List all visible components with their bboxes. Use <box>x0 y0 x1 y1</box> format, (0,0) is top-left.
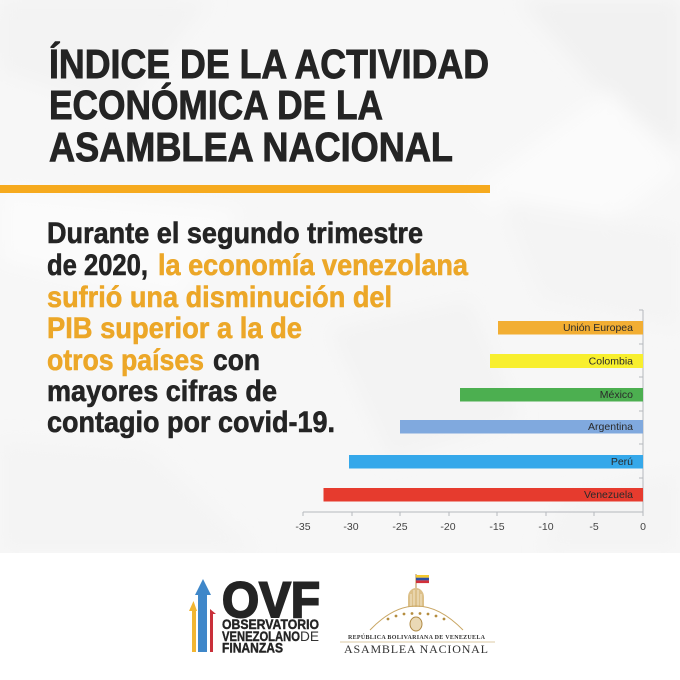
text block: summary: otros países <box>47 344 204 377</box>
logo: Asamblea Nacional: REPÚBLICA BOLIVARIANA DE VENEZUELA <box>348 633 486 641</box>
text block: summary: sufrió una disminución del <box>47 281 392 314</box>
text block: summary: con <box>213 344 260 377</box>
text block: summary <box>47 217 468 439</box>
logo: OVF: VENEZOLANO <box>222 629 300 644</box>
title: ASAMBLEA NACIONAL <box>49 124 453 170</box>
title: ECONÓMICA DE LA <box>49 82 383 128</box>
text block: summary: contagio por covid-19. <box>47 406 335 439</box>
logo: OVF <box>189 572 320 656</box>
text block: summary: mayores cifras de <box>47 375 277 408</box>
bar: México: México <box>600 389 633 401</box>
logo: OVF: OBSERVATORIO <box>222 617 319 632</box>
bar: Perú: Perú <box>611 456 633 468</box>
text block: summary: Durante el segundo trimestre <box>47 217 423 250</box>
axis labels: -35 <box>295 521 311 533</box>
bar: Venezuela: Venezuela <box>584 489 633 501</box>
icon: rising arrows <box>189 579 216 652</box>
text block: summary: de 2020, <box>47 249 148 282</box>
bar: México <box>460 388 643 402</box>
axis labels <box>295 521 646 533</box>
bar: Perú <box>349 455 643 468</box>
text block: summary: PIB superior a la de <box>47 312 302 345</box>
icon: flag <box>416 574 429 588</box>
bar: Argentina: Argentina <box>588 421 633 433</box>
bar: Argentina <box>400 420 643 434</box>
axis labels: -15 <box>489 521 505 533</box>
axis labels: -5 <box>589 521 599 533</box>
bar: Colombia: Colombia <box>589 356 633 368</box>
axis labels: -20 <box>440 521 456 533</box>
title: ÍNDICE DE LA ACTIVIDAD <box>49 41 489 87</box>
divider rule <box>0 185 490 193</box>
axis labels: -10 <box>538 521 554 533</box>
logo: OVF: FINANZAS <box>222 640 283 656</box>
logo: OVF: OVF <box>222 572 320 628</box>
logo: Asamblea Nacional: ASAMBLEA NACIONAL <box>344 642 488 656</box>
axis labels: -25 <box>392 521 408 533</box>
title <box>49 41 489 170</box>
panel: white footer band <box>0 553 680 680</box>
bar chart: GDP change by country <box>295 310 646 533</box>
bar: Venezuela <box>324 488 643 502</box>
axis labels: 0 <box>640 521 646 533</box>
icon: capitol dome <box>370 588 463 631</box>
bar: Unión Europea <box>498 321 643 334</box>
bar: Unión Europea: Unión Europea <box>563 322 633 334</box>
axis labels: -30 <box>343 521 359 533</box>
text block: summary: la economía venezolana <box>158 249 468 282</box>
logo: Asamblea Nacional <box>340 574 495 656</box>
logo: OVF: DE <box>300 629 319 644</box>
bar: Colombia <box>490 354 643 368</box>
